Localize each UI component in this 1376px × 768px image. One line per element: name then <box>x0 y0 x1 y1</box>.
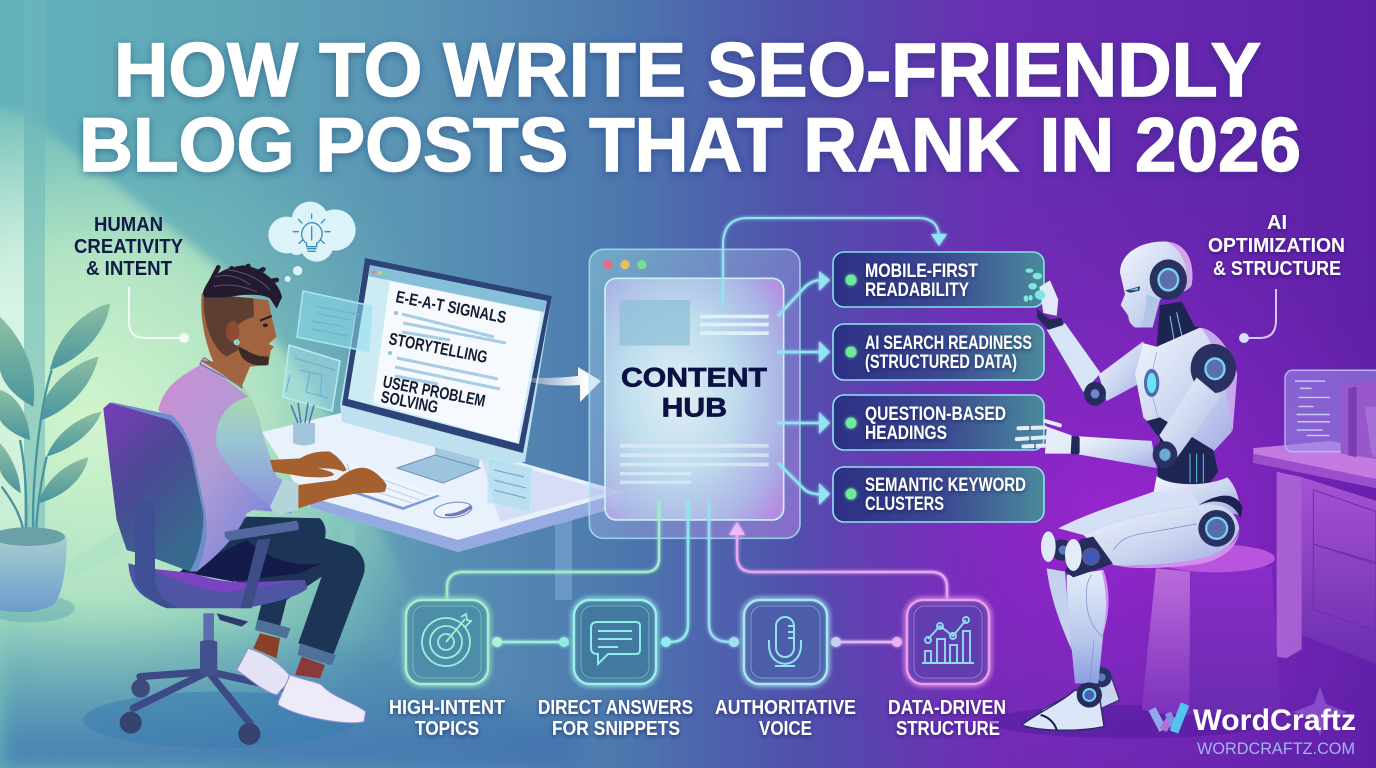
card: question-based headings: QUESTION-BASED <box>865 404 1006 425</box>
near knee <box>1065 537 1113 577</box>
card: question-based headings <box>833 395 1044 450</box>
arrow: hub loop to mobile-first card <box>723 218 947 306</box>
robot upper body <box>1024 268 1237 495</box>
neck <box>1157 301 1203 352</box>
callout: ai optimization and structure: OPTIMIZATION <box>1208 235 1345 257</box>
callout: human creativity and intent: HUMAN <box>94 214 163 236</box>
shirt <box>158 358 298 572</box>
icon: bar and line chart <box>922 617 974 663</box>
icon card: data-driven structure <box>888 600 1006 740</box>
card: mobile-first readability <box>833 252 1044 307</box>
callout: ai optimization and structure <box>1208 212 1345 343</box>
raised arm <box>1024 268 1144 406</box>
near shin <box>1067 570 1108 683</box>
logo: WordCraftz: WORDCRAFTZ.COM <box>1197 739 1355 758</box>
callout: human creativity and intent: & INTENT <box>86 258 172 280</box>
label <box>888 697 1006 740</box>
stool and robot far leg <box>990 544 1281 738</box>
card: semantic keyword clusters <box>833 467 1044 522</box>
hologram note on right desk <box>1285 370 1376 452</box>
icon: speech bubble <box>591 622 640 664</box>
card: semantic keyword clusters: CLUSTERS <box>865 494 944 515</box>
label: STRUCTURE <box>896 718 1000 740</box>
icon: target with arrow <box>422 614 471 666</box>
screen text: SOLVING <box>379 387 440 417</box>
lower hand <box>1017 421 1072 454</box>
plant pot <box>0 527 75 622</box>
card: mobile-first readability: READABILITY <box>865 280 969 301</box>
card: mobile-first readability: MOBILE-FIRST <box>865 261 978 282</box>
label <box>715 697 856 740</box>
card: ai search readiness: AI SEARCH READINESS <box>865 333 1032 354</box>
arrows: hub to feature cards <box>777 271 830 505</box>
screen text: STORYTELLING <box>387 329 489 367</box>
floating hologram panels <box>283 291 532 513</box>
callout: human creativity and intent <box>74 214 189 343</box>
callout: ai optimization and structure: & STRUCTURE <box>1213 258 1341 280</box>
card: ai search readiness: (STRUCTURED DATA) <box>865 352 1017 373</box>
hub heading: CONTENT <box>621 363 767 393</box>
near thigh and hip <box>1083 496 1243 568</box>
label: FOR SNIPPETS <box>552 718 680 740</box>
label <box>389 697 505 740</box>
title <box>79 28 1301 188</box>
mouse <box>433 500 473 520</box>
books <box>1341 381 1376 459</box>
panel: content hub <box>589 249 800 538</box>
screen text: E-E-A-T SIGNALS <box>394 287 508 327</box>
person head <box>200 265 282 387</box>
pencil cup <box>291 403 315 446</box>
plant <box>0 303 110 622</box>
label: HIGH-INTENT <box>389 697 505 719</box>
office chair lower <box>83 613 357 748</box>
icon card: direct answers for snippets <box>538 600 693 740</box>
desk with keyboard and mouse <box>262 412 624 600</box>
hub heading: HUB <box>662 393 727 423</box>
connectors: icons to content hub <box>447 500 947 647</box>
desk on right <box>1253 370 1376 664</box>
keyboard <box>347 461 440 510</box>
far leg and foot <box>1040 568 1119 714</box>
far knee <box>1041 531 1072 562</box>
title: HOW TO WRITE SEO-FRIENDLY <box>114 28 1261 113</box>
head <box>1120 241 1192 328</box>
logo: WordCraftz: WordCraftz <box>1193 704 1356 737</box>
screen text: USER PROBLEM <box>381 372 487 411</box>
title: BLOG POSTS THAT RANK IN 2026 <box>79 103 1301 188</box>
card: ai search readiness <box>833 324 1044 380</box>
card: question-based headings: HEADINGS <box>865 423 947 444</box>
waist <box>1147 417 1218 495</box>
arrow: monitor to content hub <box>512 367 601 402</box>
icon card: authoritative voice <box>715 600 856 740</box>
stool <box>990 544 1281 738</box>
logo: WordCraftz <box>1152 687 1356 758</box>
callout: human creativity and intent: CREATIVITY <box>74 236 184 258</box>
far thigh <box>1058 492 1200 535</box>
chair seat <box>128 563 307 608</box>
card: semantic keyword clusters: SEMANTIC KEYWORD <box>865 475 1026 496</box>
label: AUTHORITATIVE <box>715 697 856 719</box>
thought bubble with lightbulb <box>268 202 356 282</box>
screen text <box>379 287 508 417</box>
label: DATA-DRIVEN <box>888 697 1006 719</box>
upper arm and elbow <box>1071 344 1236 468</box>
near foot <box>1022 682 1104 730</box>
hub heading <box>621 363 767 423</box>
panel: feature cards <box>833 252 1044 522</box>
robot legs <box>1022 476 1243 730</box>
torso <box>1135 328 1237 452</box>
icon card: high-intent topics <box>389 600 505 740</box>
computer monitor <box>340 258 552 483</box>
label <box>538 697 693 740</box>
icon: W mark <box>1152 704 1185 732</box>
chair back <box>103 403 207 608</box>
icon: lightbulb <box>293 214 330 251</box>
hip shell <box>1153 476 1240 515</box>
callout: ai optimization and structure: AI <box>1267 212 1287 234</box>
label: VOICE <box>759 718 812 740</box>
robot lower arm and head <box>1017 241 1236 468</box>
label: DIRECT ANSWERS <box>538 697 693 719</box>
icon: microphone <box>769 617 801 666</box>
person arms and hands <box>270 451 387 515</box>
label: TOPICS <box>415 718 479 740</box>
armrest <box>225 521 299 608</box>
person <box>103 358 366 723</box>
monitor stand <box>397 445 480 483</box>
legs and shoes <box>180 517 366 723</box>
